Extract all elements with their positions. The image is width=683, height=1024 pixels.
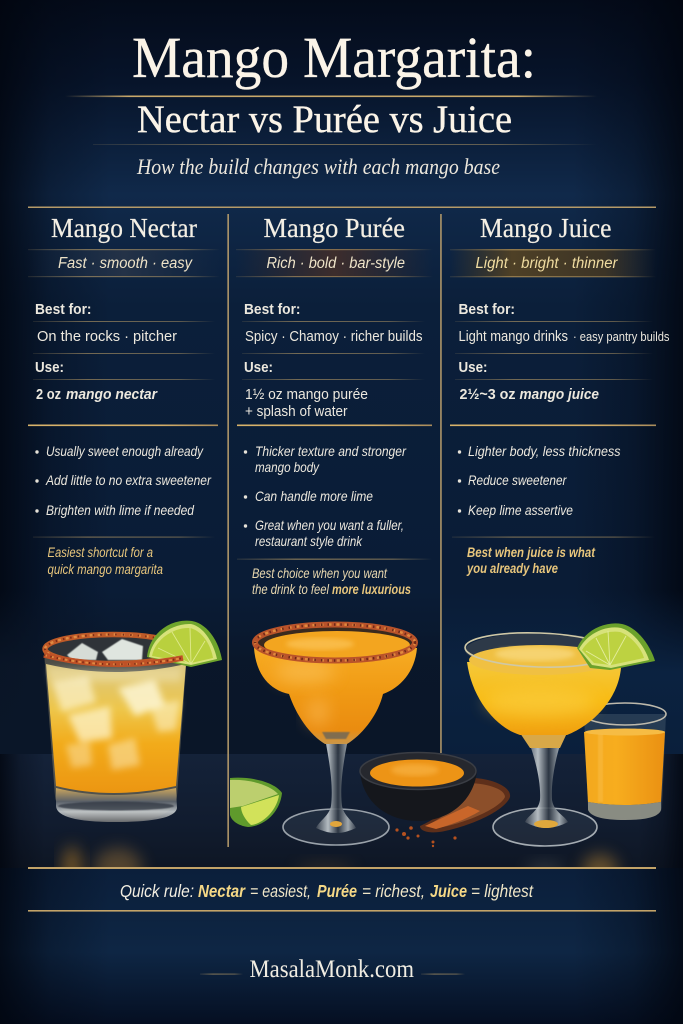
note: quick mango margarita	[48, 562, 163, 577]
best for: Best for:	[35, 301, 92, 318]
best for: Light mango drinks	[458, 328, 568, 345]
footer: website credit: MasalaMonk.com	[250, 956, 414, 983]
subtitle: comparison: Nectar vs Purée vs Juice	[137, 98, 512, 141]
best for: Spicy · Chamoy · richer builds	[245, 328, 422, 345]
best for: · easy pantry builds	[573, 330, 670, 344]
note: Best choice when you want	[252, 566, 388, 581]
note: the drink to feel	[252, 582, 330, 597]
quick rule banner: Quick rule:	[120, 881, 194, 901]
bullet list: Lighter body, less thickness	[468, 443, 620, 459]
bullet list: Thicker texture and stronger	[255, 443, 407, 459]
note	[252, 566, 411, 597]
bullet list: Add little to no extra sweetener	[45, 472, 212, 488]
quick rule banner: Juice	[430, 881, 467, 901]
bullet list: Brighten with lime if needed	[46, 502, 195, 518]
use: Use:	[35, 359, 64, 376]
quick rule banner: Purée	[317, 881, 357, 901]
photo scene	[0, 214, 683, 890]
tagline: Light · bright · thinner	[476, 255, 618, 272]
use: Use:	[458, 359, 488, 376]
bullet list: restaurant style drink	[255, 533, 363, 549]
use	[33, 359, 215, 403]
bullet list: Usually sweet enough already	[46, 443, 204, 459]
quick rule banner	[28, 867, 656, 912]
use: mango nectar	[66, 386, 158, 403]
use: 2½~3 oz	[460, 386, 516, 403]
heading: Mango Nectar	[51, 213, 197, 243]
bullet list	[244, 443, 407, 549]
wall and table	[0, 606, 683, 867]
panel: mango puree	[236, 213, 433, 597]
note	[48, 545, 163, 577]
use: 1½ oz mango purée	[245, 386, 368, 403]
icon: rocks glass with mango nectar	[44, 621, 222, 822]
tagline: Rich · bold · bar-style	[266, 255, 405, 272]
note: more luxurious	[332, 582, 411, 597]
icon: lime wedge	[147, 621, 222, 667]
note: you already have	[466, 561, 558, 576]
icon: margarita glass with mango puree	[254, 624, 417, 845]
heading: Mango Juice	[480, 213, 612, 243]
use: 2 oz	[36, 386, 61, 403]
use	[455, 359, 653, 403]
bullet list: Reduce sweetener	[468, 472, 568, 488]
icon: lime wedge on coupe	[577, 623, 655, 670]
icon: shot glass of mango juice	[584, 703, 666, 820]
bullet list: Great when you want a fuller,	[255, 517, 404, 533]
bullet list: mango body	[255, 459, 320, 475]
use: Use:	[244, 359, 273, 376]
icon: bowl of mango puree	[360, 752, 477, 821]
note: Easiest shortcut for a	[48, 545, 153, 560]
best for	[242, 301, 425, 354]
note	[466, 545, 595, 576]
icon: small lime wedge on table	[230, 778, 282, 827]
title block	[65, 25, 597, 179]
bullet list	[35, 443, 212, 518]
tagline: Fast · smooth · easy	[58, 255, 193, 272]
best for	[33, 301, 215, 354]
quick rule banner: = lightest	[471, 881, 534, 901]
best for: Best for:	[458, 301, 515, 318]
panel: mango nectar	[28, 213, 220, 577]
heading: Mango Purée	[264, 213, 405, 243]
quick rule banner: = easiest,	[250, 881, 311, 901]
icon: coupe glass with mango juice	[464, 623, 655, 846]
tagline: How the build changes with each mango base	[136, 154, 500, 179]
dividers	[227, 214, 442, 847]
panel: mango juice	[450, 213, 670, 576]
quick rule banner: Nectar	[198, 881, 246, 901]
use: mango juice	[520, 386, 599, 403]
best for: Best for:	[244, 301, 300, 318]
use	[242, 359, 425, 420]
bullet list: Can handle more lime	[255, 488, 373, 504]
best for: On the rocks · pitcher	[37, 328, 177, 345]
main title: Mango Margarita:	[132, 25, 536, 90]
best for	[455, 301, 670, 354]
icon: spoon of chili salt	[395, 778, 510, 847]
note: Best when juice is what	[467, 545, 595, 560]
quick rule banner: = richest,	[362, 881, 425, 901]
bullet list	[458, 443, 620, 518]
bullet list: Keep lime assertive	[468, 502, 573, 518]
use: + splash of water	[245, 403, 348, 420]
